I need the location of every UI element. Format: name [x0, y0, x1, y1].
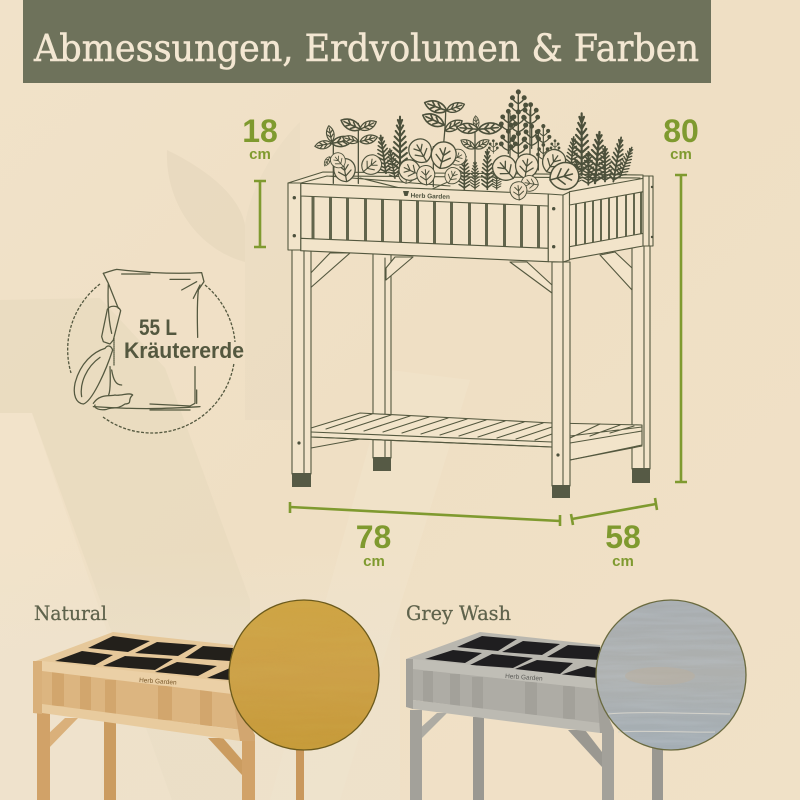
label: 55 L: 55 L [139, 315, 177, 340]
dimension: bed depth 18 cm: 18 [242, 113, 278, 149]
legs and braces [37, 712, 304, 800]
logo: Herb Garden: Herb Garden [139, 677, 177, 687]
icon: bag and trowel [74, 269, 204, 410]
dimension: bed depth 18 cm: cm [249, 146, 271, 163]
soil compartments [55, 636, 233, 680]
herbs [314, 90, 637, 201]
label: Grey Wash: Grey Wash [406, 601, 511, 625]
photo: grey wash raised bed [406, 632, 663, 800]
bed box [288, 172, 653, 262]
dimension: depth 58 cm: cm [612, 553, 634, 570]
line drawing: raised bed with plants [288, 90, 653, 498]
dimension: height 80 cm: 80 [663, 113, 699, 149]
dimension: width 78 cm: 78 [356, 519, 391, 555]
title banner [23, 0, 711, 83]
title banner: Abmessungen, Erdvolumen & Farben [33, 27, 699, 70]
dimension: height 80 cm [663, 113, 699, 482]
braces [305, 252, 632, 293]
rosemary [375, 117, 407, 179]
dimension: depth 58 cm [571, 498, 657, 570]
front rails and post [42, 661, 232, 694]
front rails and post [413, 659, 597, 689]
soil compartments [425, 636, 600, 678]
basil centre right [456, 116, 502, 188]
soil bag illustration with 55 L label [68, 269, 244, 433]
dimension: width 78 cm: cm [363, 553, 385, 570]
icon: dashed circle [68, 284, 235, 433]
boards [42, 670, 242, 730]
lower shelf [311, 413, 642, 460]
bed logo: Herb Garden: Herb Garden [410, 193, 450, 201]
swatch: natural wood [229, 600, 379, 750]
legs and braces [410, 710, 663, 800]
swatch: grey wash wood [596, 600, 746, 750]
sage spikes right [565, 113, 637, 185]
dimension: depth 58 cm: 58 [605, 519, 641, 555]
back legs [373, 240, 650, 483]
low spikes [459, 149, 501, 189]
logo: Herb Garden: Herb Garden [505, 673, 543, 683]
label: Natural: Natural [34, 601, 107, 625]
thyme [488, 90, 560, 170]
large sage leaves [488, 145, 582, 201]
photo: natural raised bed [33, 632, 304, 800]
front legs [292, 250, 570, 498]
basil left [314, 116, 416, 184]
label: Kräutererde: Kräutererde [124, 338, 244, 363]
boards [413, 669, 600, 724]
dimension: width 78 cm [290, 502, 560, 570]
bed top frame [33, 632, 240, 700]
dimension: bed depth 18 cm [242, 113, 278, 247]
dimension: height 80 cm: cm [670, 146, 692, 163]
bed top frame [406, 632, 606, 700]
central mint [396, 98, 469, 187]
